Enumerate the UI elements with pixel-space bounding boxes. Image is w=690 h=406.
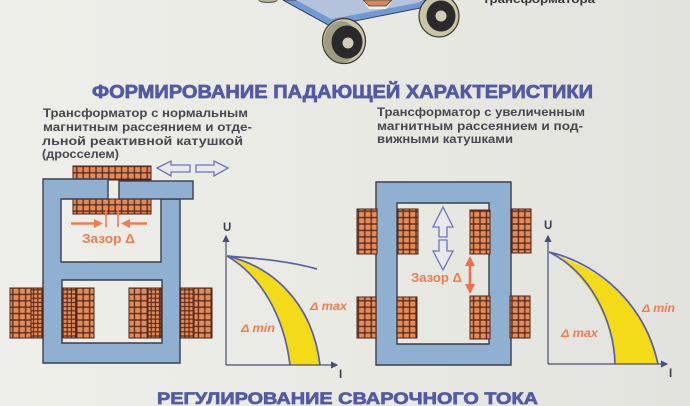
movable core bar xyxy=(119,181,193,199)
heading: falling characteristic: ФОРМИРОВАНИЕ ПАДАЮЩЕЙ ХАРАКТЕРИСТИКИ xyxy=(92,81,593,102)
text block: left transformer description: льной реактивной катушкой xyxy=(42,134,243,148)
magnetic core xyxy=(376,182,511,365)
winding: lower right inner xyxy=(470,296,490,339)
top reactor coil xyxy=(73,166,151,180)
diagram: transformer with movable coils xyxy=(357,182,531,365)
winding: left outer xyxy=(10,288,43,338)
axis label U: U xyxy=(223,222,231,234)
icon: up-down hollow arrows xyxy=(433,207,453,270)
label: delta max: Δ max xyxy=(309,301,348,313)
winding: upper right inner xyxy=(470,210,490,254)
winding: lower left inner xyxy=(397,297,417,338)
gap marker arrows xyxy=(71,205,147,228)
winding: upper right outer xyxy=(511,209,531,253)
yellow range area xyxy=(556,256,658,364)
illustration: welding transformer cart xyxy=(259,0,459,64)
curves xyxy=(227,256,320,365)
text block: left transformer description: магнитным рассеянием и отде- xyxy=(43,120,252,134)
axes xyxy=(225,236,227,365)
label: delta min: Δ min xyxy=(240,323,275,335)
gap label: Зазор Δ xyxy=(411,271,462,285)
axis label I: I xyxy=(339,369,342,381)
chart: U-I curves, right xyxy=(544,220,675,380)
chart: U-I curves, left xyxy=(223,222,348,381)
text block: right transformer description: Трансформатор с увеличенным xyxy=(377,105,585,119)
lower reactor coil xyxy=(73,199,151,214)
winding: lower right outer xyxy=(510,296,530,338)
winding: upper left inner xyxy=(398,209,418,254)
gap arrow xyxy=(465,256,475,294)
diagram: transformer with separate reactor coil xyxy=(10,166,212,363)
axis label I: I xyxy=(669,368,672,380)
yellow range area xyxy=(233,258,320,365)
axis label U: U xyxy=(544,220,552,232)
curves xyxy=(549,252,658,364)
axes xyxy=(547,236,549,364)
winding: lower left outer xyxy=(357,297,376,338)
text block: right transformer description: вижными катушками xyxy=(377,132,513,146)
gap label: Зазор Δ xyxy=(82,232,135,246)
text block: left transformer description: (дросселем) xyxy=(42,147,119,161)
icon: left-right hollow arrows xyxy=(157,161,228,176)
winding: left inner xyxy=(62,288,94,338)
magnetic core xyxy=(43,179,180,363)
text block: right transformer description: магнитным рассеянием и под- xyxy=(377,119,583,133)
winding: right inner xyxy=(129,288,161,338)
winding: right outer xyxy=(180,288,212,338)
label: delta max: Δ max xyxy=(560,328,599,340)
text block: left transformer description: Трансформатор с нормальным xyxy=(43,106,248,120)
label: delta min: Δ min xyxy=(641,303,675,315)
winding: upper left outer xyxy=(357,209,377,254)
